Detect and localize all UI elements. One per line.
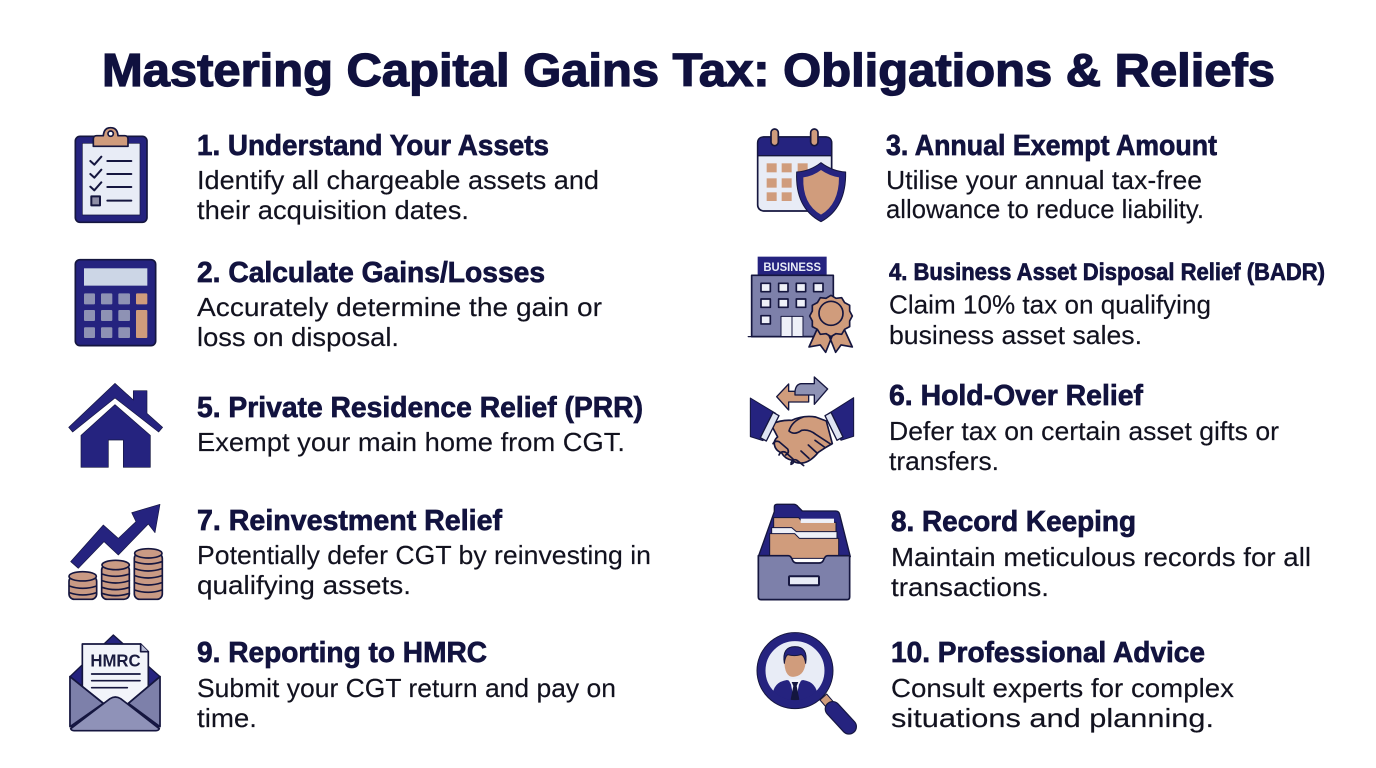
body text: their acquisition dates. [197, 195, 469, 225]
icon: rising arrow over coin stacks [69, 504, 162, 599]
body text: transactions. [891, 572, 1049, 602]
heading: 1. Understand Your Assets [197, 130, 549, 162]
item 4: business asset disposal relief [748, 257, 1325, 352]
body text: situations and planning. [891, 703, 1214, 733]
item 9: reporting to HMRC [70, 635, 616, 733]
body text: allowance to reduce liability. [886, 194, 1204, 224]
body text: time. [197, 703, 257, 733]
item 6: hold-over relief [750, 377, 1279, 476]
icon: business building with rosette: BUSINESS [763, 260, 821, 274]
icon: magnifier with advisor [757, 633, 849, 727]
item 2: calculate gains and losses [75, 257, 602, 352]
body text [889, 416, 1279, 476]
heading: 4. Business Asset Disposal Relief (BADR) [889, 259, 1325, 286]
item 3: annual exempt amount [758, 129, 1217, 224]
body text: qualifying assets. [197, 570, 411, 600]
body text [891, 542, 1311, 602]
body text: Potentially defer CGT by reinvesting in [197, 540, 651, 570]
body text: Maintain meticulous records for all [891, 542, 1311, 572]
body text: loss on disposal. [197, 322, 399, 352]
heading: 9. Reporting to HMRC [197, 637, 487, 669]
body text: Defer tax on certain asset gifts or [889, 416, 1279, 446]
item 7: reinvestment relief [69, 504, 651, 600]
icon: envelope with HMRC letter [70, 635, 160, 731]
heading: 8. Record Keeping [891, 506, 1136, 538]
heading: 2. Calculate Gains/Losses [197, 257, 545, 289]
icon: file drawer [758, 504, 850, 600]
item 1: understand your assets [75, 128, 599, 225]
icon: calculator [75, 260, 156, 346]
body text [197, 673, 616, 733]
item 5: private residence relief [69, 383, 643, 467]
body text: transfers. [889, 446, 999, 476]
body text: Utilise your annual tax-free [886, 165, 1202, 195]
item 10: professional advice [757, 633, 1234, 733]
icon: business building with rosette [748, 257, 852, 352]
heading: 5. Private Residence Relief (PRR) [197, 392, 643, 424]
body text [197, 540, 651, 600]
body text: Identify all chargeable assets and [197, 165, 599, 195]
item 8: record keeping [758, 504, 1311, 602]
body text: Consult experts for complex [891, 673, 1234, 703]
icon: envelope with HMRC letter: HMRC [90, 651, 141, 671]
icon: house [69, 383, 163, 467]
heading: 7. Reinvestment Relief [197, 505, 502, 537]
heading: 3. Annual Exempt Amount [886, 130, 1217, 162]
body text: business asset sales. [889, 320, 1142, 350]
heading: 6. Hold-Over Relief [889, 380, 1143, 412]
icon: handshake with exchange arrows [750, 377, 854, 466]
body text [889, 290, 1211, 350]
body text: Claim 10% tax on qualifying [889, 290, 1211, 320]
body text [197, 292, 602, 352]
body text [886, 165, 1204, 224]
heading: 10. Professional Advice [891, 637, 1205, 669]
title: Mastering Capital Gains Tax: Obligations & Reliefs [102, 44, 1275, 96]
body text [891, 673, 1234, 733]
body text: Submit your CGT return and pay on [197, 673, 616, 703]
body text: Exempt your main home from CGT. [197, 427, 625, 457]
body text: Accurately determine the gain or [197, 292, 602, 322]
body text [197, 165, 599, 225]
icon: clipboard checklist [75, 128, 147, 222]
icon: calendar with shield [758, 129, 846, 222]
